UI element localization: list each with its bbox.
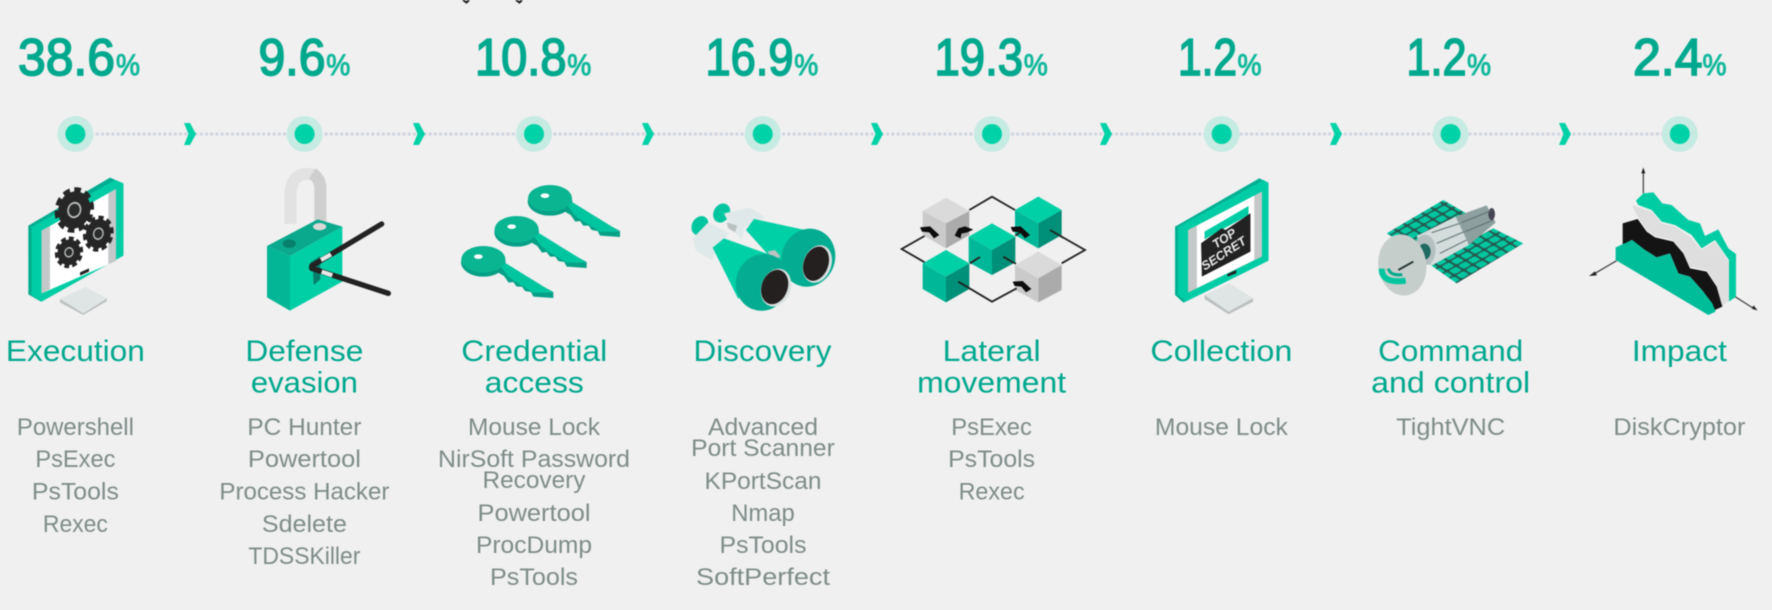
tools list: TDSSKiller <box>248 543 360 570</box>
percentage 9.6%: % <box>326 49 350 82</box>
tools list: ProcDump <box>476 532 592 559</box>
timeline arrows <box>184 123 1571 145</box>
tools list: TightVNC <box>1396 414 1505 441</box>
tools list: Sdelete <box>262 511 347 538</box>
tools list: Process Hacker <box>219 478 389 506</box>
icon text: top secret: SECRET <box>1199 233 1250 273</box>
tools list: Powertool <box>248 446 361 473</box>
tools list: PsExec <box>35 446 115 473</box>
percentage 38.6%: 38.6 <box>18 29 115 87</box>
heading: Lateral movement: movement <box>917 366 1067 400</box>
tools list: Nmap <box>731 500 795 527</box>
icon: monitor with gears <box>28 178 123 315</box>
tools list: DiskCryptor <box>1613 414 1745 441</box>
heading: Collection: Collection <box>1150 335 1292 368</box>
tools list: PsTools <box>948 446 1035 473</box>
percentage 19.3%: 19.3 <box>934 29 1023 87</box>
heading: Credential access <box>461 335 607 400</box>
icon: satellite <box>1374 200 1523 299</box>
timeline node <box>1204 116 1240 152</box>
column: Collection <box>1150 29 1292 441</box>
tools list: SoftPerfect <box>696 564 830 591</box>
tools list: PsTools <box>720 532 806 559</box>
percentage 16.9%: 16.9 <box>706 29 794 87</box>
tools list: KPortScan <box>704 468 822 495</box>
tools list <box>438 414 630 591</box>
heading: Lateral movement: Lateral <box>943 335 1041 368</box>
percentage 9.6%: 9.6 <box>258 29 326 87</box>
clipped caption descenders <box>463 0 522 3</box>
tools list: Port Scanner <box>691 435 835 462</box>
percentage 1.2%: % <box>1467 49 1491 82</box>
heading: Command and control: Command <box>1378 335 1523 368</box>
icon: layered 3D chart <box>1589 167 1758 315</box>
heading: Command and control <box>1371 335 1530 400</box>
icon: network of cubes <box>902 197 1085 302</box>
percentage 10.8%: % <box>567 49 591 82</box>
percentage 1.2%: 1.2 <box>1406 29 1466 87</box>
column: Lateral movement <box>902 29 1085 506</box>
icon: monitor with top secret folder <box>1175 178 1268 314</box>
column: Defense evasion <box>219 29 389 570</box>
heading: Discovery: Discovery <box>694 335 832 368</box>
tools list: PsTools <box>490 564 578 591</box>
percentage 2.4%: 2.4 <box>1633 29 1702 87</box>
icon: padlock being picked <box>267 173 388 311</box>
tools list: PsTools <box>32 478 119 506</box>
tools list: Rexec <box>43 511 108 538</box>
timeline node <box>1433 116 1469 152</box>
icon: binoculars <box>688 200 843 318</box>
heading: Credential access: Credential <box>461 335 607 368</box>
heading: Execution: Execution <box>6 335 145 368</box>
heading: Defense evasion <box>245 335 363 400</box>
timeline node <box>974 116 1010 152</box>
tools list: Mouse Lock <box>468 414 601 441</box>
tools list: Powertool <box>478 500 590 527</box>
tools list: Rexec <box>959 478 1025 506</box>
tools list: Recovery <box>482 467 586 494</box>
timeline node <box>516 116 552 152</box>
tools list: PsExec <box>951 414 1032 441</box>
column: Impact <box>1589 29 1758 441</box>
heading: Impact: Impact <box>1632 335 1728 368</box>
percentage 16.9%: % <box>794 49 818 82</box>
timeline node <box>1662 116 1698 152</box>
heading: Defense evasion: Defense <box>245 335 363 368</box>
timeline node <box>57 116 93 152</box>
heading: Defense evasion: evasion <box>251 366 358 400</box>
percentage 38.6%: % <box>116 49 140 82</box>
timeline node <box>287 116 323 152</box>
percentage 1.2%: % <box>1238 49 1262 82</box>
column: Discovery <box>688 29 843 591</box>
heading: Lateral movement <box>917 335 1067 400</box>
timeline node <box>745 116 781 152</box>
column: Credential access <box>438 29 630 591</box>
percentage 1.2%: 1.2 <box>1178 29 1237 87</box>
tools list: Mouse Lock <box>1155 414 1289 441</box>
tools list <box>691 414 835 591</box>
tools list <box>219 414 389 570</box>
tools list: PC Hunter <box>247 414 361 441</box>
percentage 10.8%: 10.8 <box>475 29 566 87</box>
icon text: top secret: TOP <box>1210 225 1239 251</box>
tools list: Powershell <box>17 414 134 441</box>
heading: Credential access: access <box>485 366 584 400</box>
icon: three keys <box>461 185 620 298</box>
tools list: Advanced <box>708 414 818 441</box>
heading: Command and control: and control <box>1371 366 1530 400</box>
tools list <box>948 414 1035 506</box>
percentage 19.3%: % <box>1024 49 1048 82</box>
column: Execution <box>6 29 145 538</box>
tools list: NirSoft Password <box>438 446 630 473</box>
timeline dotted line <box>75 132 1680 136</box>
tools list <box>17 414 134 538</box>
column: Command and control <box>1371 29 1530 441</box>
percentage 2.4%: % <box>1702 49 1726 82</box>
